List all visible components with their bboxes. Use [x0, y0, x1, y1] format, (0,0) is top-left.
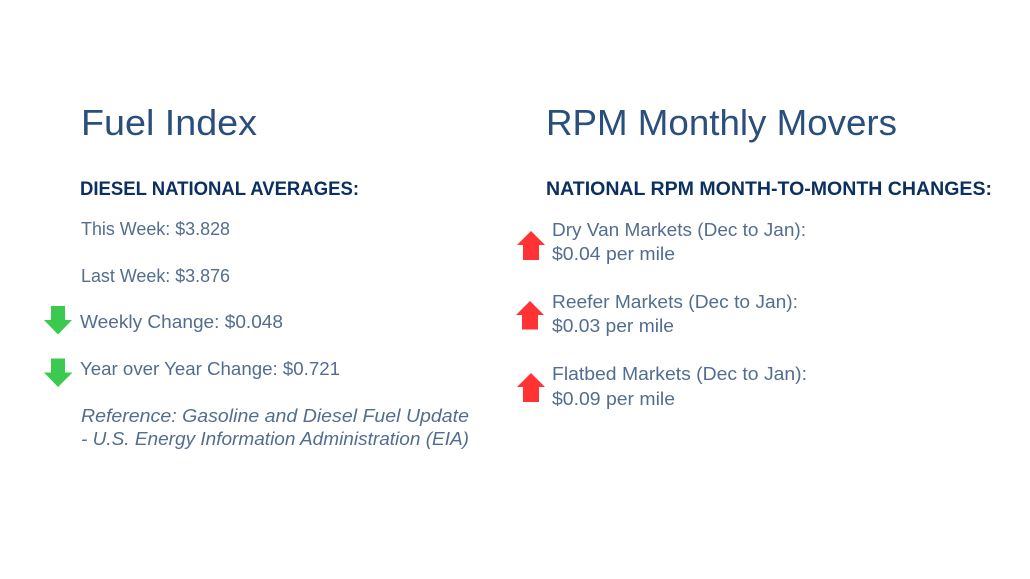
- heading: diesel national averages: DIESEL NATIONAL AVERAGES:: [80, 179, 359, 200]
- panel: fuel index: [44, 102, 469, 449]
- text: dry van markets: [552, 220, 806, 264]
- icon: green down arrow, weekly change: [44, 306, 72, 334]
- text: reefer markets: Reefer Markets (Dec to Jan):: [552, 292, 798, 312]
- text: reference note: - U.S. Energy Information Administration (EIA): [81, 429, 469, 449]
- text: weekly change: Weekly Change: $0.048: [80, 312, 283, 332]
- text: reference note: Reference: Gasoline and Diesel Fuel Update: [81, 406, 469, 426]
- text: reefer markets: [552, 292, 798, 336]
- icon: red up arrow, flatbed: [517, 373, 545, 402]
- title: Fuel Index: Fuel Index: [81, 102, 257, 143]
- text: this week: This Week: $3.828: [81, 219, 230, 239]
- text: reference note: [81, 406, 469, 449]
- heading: national RPM month-to-month changes: NATIONAL RPM MONTH-TO-MONTH CHANGES:: [546, 179, 992, 200]
- icon: red up arrow, dry van: [517, 231, 545, 260]
- text: last week: Last Week: $3.876: [81, 266, 230, 286]
- title: RPM Monthly Movers: RPM Monthly Movers: [546, 102, 897, 143]
- text: dry van markets: $0.04 per mile: [552, 244, 675, 264]
- icon: red up arrow, reefer: [516, 301, 544, 330]
- text: flatbed markets: Flatbed Markets (Dec to Jan):: [552, 364, 807, 384]
- icon: green down arrow, year over year change: [44, 358, 72, 387]
- text: reefer markets: $0.03 per mile: [552, 316, 674, 336]
- text: year over year change: Year over Year Change: $0.721: [80, 359, 340, 379]
- panel: RPM monthly movers: [516, 102, 992, 409]
- text: flatbed markets: $0.09 per mile: [552, 389, 675, 409]
- text: flatbed markets: [552, 364, 807, 409]
- text: dry van markets: Dry Van Markets (Dec to Jan):: [552, 220, 806, 240]
